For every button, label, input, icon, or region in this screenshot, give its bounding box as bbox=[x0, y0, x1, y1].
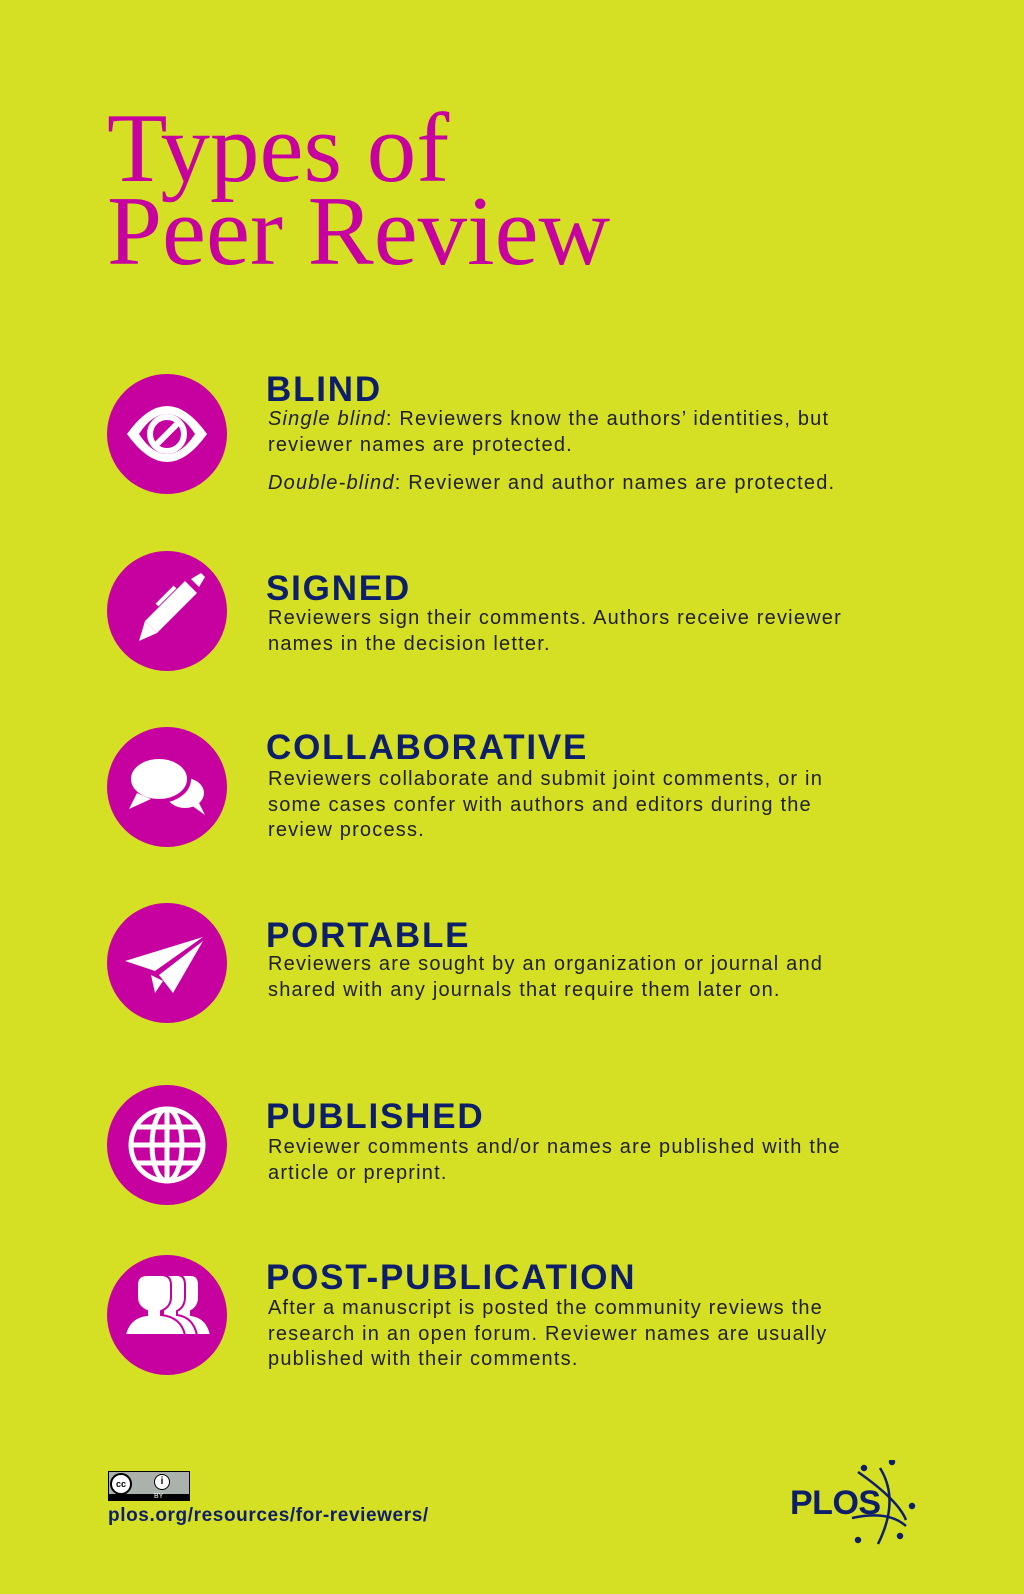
footer url: plos.org/resources/for-reviewers/ bbox=[108, 1505, 429, 1526]
text: blind bbox=[268, 408, 835, 494]
text: portable bbox=[268, 953, 823, 1000]
icon: cc-by badge: BY bbox=[154, 1493, 163, 1500]
text: published: Reviewer comments and/or names are published with the bbox=[268, 1136, 841, 1158]
heading: blind: BLIND bbox=[266, 370, 382, 409]
text: portable: Reviewers are sought by an organization or journal and bbox=[268, 953, 823, 975]
text: signed: Reviewers sign their comments. Authors receive reviewer bbox=[268, 607, 842, 629]
text: blind: reviewer names are protected. bbox=[268, 434, 573, 456]
title: Types of bbox=[107, 94, 449, 203]
heading: published: PUBLISHED bbox=[266, 1097, 484, 1136]
text: signed: names in the decision letter. bbox=[268, 632, 551, 654]
logo: PLOS: PLOS bbox=[790, 1484, 881, 1522]
text: collaborative: review process. bbox=[268, 819, 425, 841]
text: collaborative: Reviewers collaborate and submit joint comments, or in bbox=[268, 768, 823, 790]
heading: portable: PORTABLE bbox=[266, 916, 470, 955]
text: blind: Double-blind: Reviewer and author names are protected. bbox=[268, 472, 835, 494]
text: portable: shared with any journals that require them later on. bbox=[268, 978, 781, 1000]
title: Peer Review bbox=[107, 177, 610, 286]
text: published: article or preprint. bbox=[268, 1162, 448, 1184]
text: collaborative: some cases confer with authors and editors during the bbox=[268, 794, 812, 816]
text: collaborative bbox=[268, 768, 823, 841]
icon: speech bubbles bbox=[107, 727, 227, 847]
heading: signed: SIGNED bbox=[266, 569, 411, 608]
heading: collaborative: COLLABORATIVE bbox=[266, 728, 588, 767]
icon: paper plane bbox=[107, 903, 227, 1023]
icon: eye blind bbox=[107, 374, 227, 494]
text: post-publication: After a manuscript is posted the community reviews the bbox=[268, 1297, 823, 1319]
icon: cc-by badge bbox=[108, 1471, 190, 1501]
icon: cc-by badge: cc bbox=[116, 1479, 126, 1489]
text: post-publication: published with their comments. bbox=[268, 1348, 579, 1370]
logo: PLOS bbox=[790, 1460, 916, 1544]
heading: post-publication: POST-PUBLICATION bbox=[266, 1258, 636, 1297]
text: blind: Single blind: Reviewers know the authors’ identities, but bbox=[268, 408, 829, 430]
text: post-publication: research in an open forum. Reviewer names are usually bbox=[268, 1322, 827, 1344]
icon: cc-by badge: i bbox=[161, 1476, 163, 1487]
text: published bbox=[268, 1136, 841, 1184]
text: signed bbox=[268, 607, 842, 654]
text: post-publication bbox=[268, 1297, 827, 1370]
icon: globe bbox=[107, 1085, 227, 1205]
icon: pen bbox=[107, 551, 227, 671]
title bbox=[107, 94, 610, 286]
icon: people bbox=[107, 1255, 227, 1375]
